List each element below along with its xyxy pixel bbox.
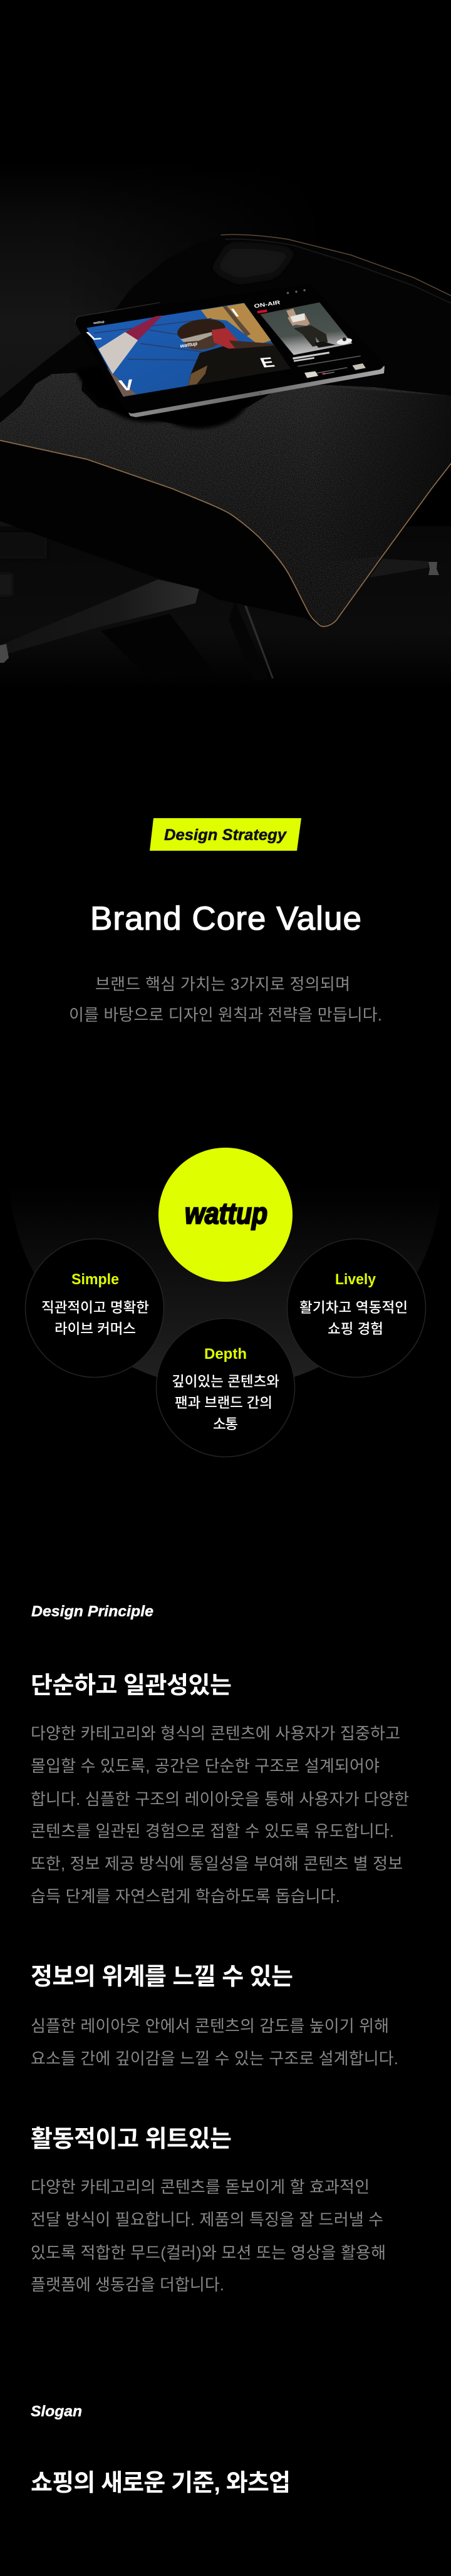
section badge: Design Strategy: Design Strategy: [164, 826, 287, 844]
title: Brand Core Value: Brand Core Value: [90, 900, 361, 937]
tablet metal edge: [128, 366, 385, 417]
hero photo: [86, 303, 291, 397]
circle: Simple: 라이브 커머스: [54, 1321, 136, 1337]
hero letters: wattup: [180, 340, 198, 349]
body text: 또한, 정보 제공 방식에 통일성을 부여해 콘텐츠 별 정보: [31, 1854, 403, 1873]
body text: 다양한 카테고리의 콘텐츠를 돋보이게 할 효과적인: [31, 2178, 370, 2196]
hero letters: I: [229, 306, 242, 319]
seat cushion body: [0, 236, 451, 626]
body text: 플랫폼에 생동감을 더합니다.: [31, 2275, 224, 2294]
subtitle text: [69, 975, 382, 1024]
tablet bezel highlight: [75, 303, 160, 323]
circle: Depth: Depth: [204, 1346, 247, 1363]
body text: 습득 단계를 자연스럽게 학습하도록 돕습니다.: [31, 1887, 340, 1906]
circle: Simple: Simple: [71, 1271, 119, 1288]
hero image: tablet on leather lounge chair: [0, 150, 451, 689]
chair legs: [0, 532, 439, 680]
tablet: [75, 284, 385, 417]
circle: Lively: 활기차고 역동적인: [299, 1300, 408, 1316]
lit fabric surface: [0, 373, 451, 626]
principle 3: [31, 2126, 386, 2294]
body text: 콘텐츠를 일관된 경험으로 접할 수 있도록 유도합니다.: [31, 1822, 394, 1841]
subtitle text: 이를 바탕으로 디자인 원칙과 전략을 만듭니다.: [69, 1005, 382, 1024]
body text: [31, 1724, 409, 1906]
circle: Lively: Lively: [335, 1271, 376, 1288]
body text: 전달 방식이 필요합니다. 제품의 특징을 잘 드러낼 수: [31, 2210, 383, 2229]
circle: Lively: [287, 1239, 426, 1377]
tablet body: [75, 284, 383, 413]
on-air panel: ON-AIR: [254, 299, 281, 309]
body text: 합니다. 심플한 구조의 레이아웃을 통해 사용자가 다양한: [31, 1790, 409, 1809]
body text: 있도록 적합한 무드(컬러)와 모션 또는 영상을 활용해: [31, 2243, 386, 2262]
body text: 요소들 간에 깊이감을 느낄 수 있는 구조로 설계합니다.: [31, 2049, 398, 2068]
tablet shadow: [75, 351, 257, 428]
center circle: wattup logo: wattup: [185, 1197, 267, 1230]
circle: Depth: 소통: [213, 1416, 238, 1432]
circle: Depth: 팬과 브랜드 간의: [175, 1395, 272, 1411]
circle: Simple: [25, 1239, 164, 1377]
hero letters: [83, 306, 277, 395]
circle: Lively: 쇼핑 경험: [328, 1321, 383, 1337]
cushion underside shadow: [0, 439, 451, 626]
section label: Slogan: Slogan: [31, 2403, 82, 2420]
principle 1: [31, 1673, 409, 1906]
subtitle text: 브랜드 핵심 가치는 3가지로 정의되며: [95, 975, 350, 994]
heading: 단순하고 일관성있는: [31, 1673, 232, 1699]
circle: Depth: [157, 1318, 294, 1457]
hero letters: L: [83, 330, 105, 343]
principle 2: [31, 1964, 398, 2068]
circle: Simple: 직관적이고 명확한: [41, 1300, 149, 1316]
body text: 다양한 카테고리와 형식의 콘텐츠에 사용자가 집중하고: [31, 1724, 400, 1743]
slogan heading: 쇼핑의 새로운 기준, 와츠업: [31, 2470, 291, 2496]
circle: Depth: 깊이있는 콘텐츠와: [172, 1374, 279, 1389]
tablet screen drawing: [83, 289, 366, 397]
on-air panel: [254, 289, 366, 378]
hero letters: V: [117, 377, 136, 395]
heading: 정보의 위계를 느낄 수 있는: [31, 1964, 293, 1990]
upper cushion sheen: [213, 246, 294, 282]
hero letters: E: [257, 354, 277, 370]
section label: Design Principle: Design Principle: [31, 1603, 153, 1620]
hero letters: wattup: [93, 320, 105, 325]
cushion piping: [0, 234, 451, 626]
body text: [31, 2017, 398, 2068]
section badge: Design Strategy: [150, 818, 301, 851]
center circle: wattup logo: [158, 1148, 293, 1282]
body text: 몰입할 수 있도록, 공간은 단순한 구조로 설계되어야: [31, 1757, 380, 1775]
diagram: brand core value circles: [19, 1148, 433, 1457]
body text: 심플한 레이아웃 안에서 콘텐츠의 감도를 높이기 위해: [31, 2017, 389, 2035]
body text: [31, 2178, 386, 2294]
heading: 활동적이고 위트있는: [31, 2126, 232, 2153]
